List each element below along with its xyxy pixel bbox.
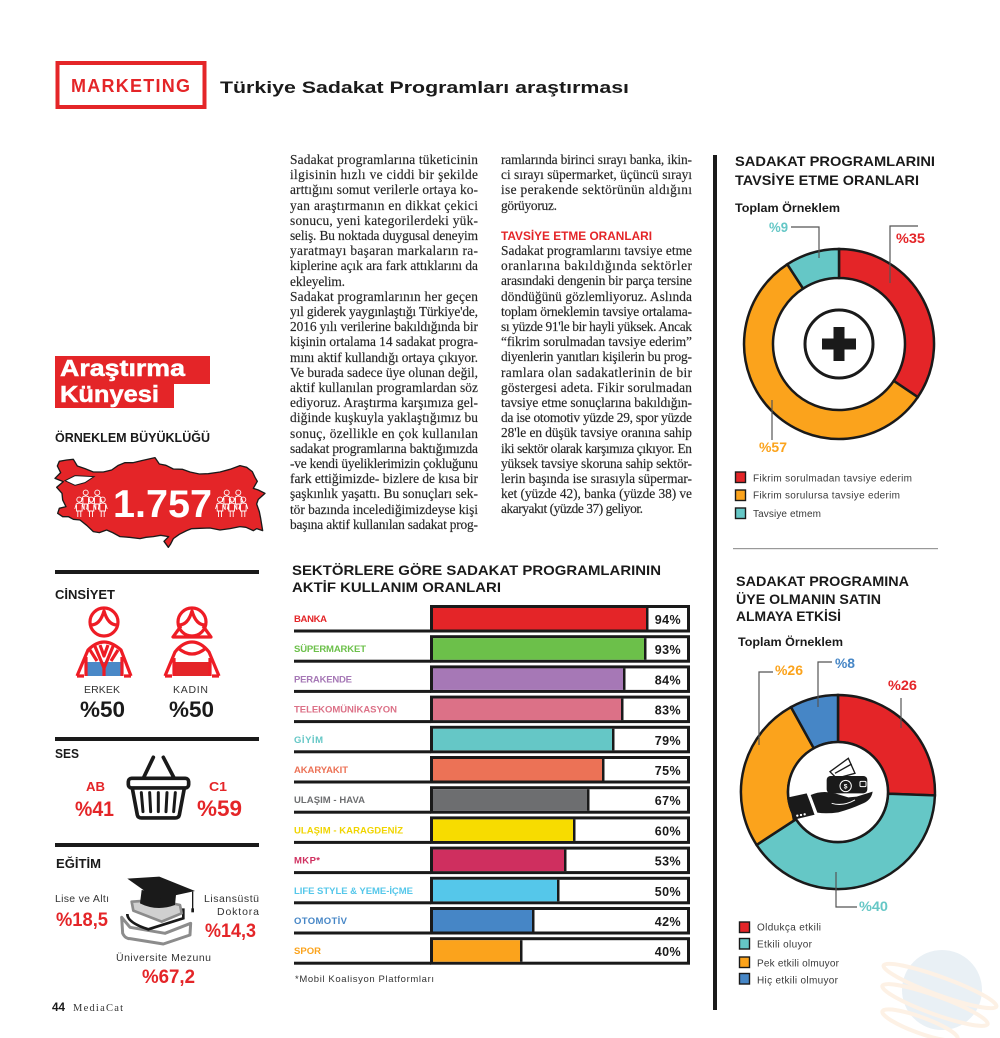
page number and magazine name	[52, 1000, 123, 1014]
high school value	[55, 893, 109, 931]
article column 2: akaryakıt (yüzde 37) geliyor.	[501, 501, 643, 516]
article column 1: ediyoruz. Araştırma karşımıza gel-	[290, 395, 478, 410]
article column 2: ramlara olan sadakatlerinin de bir	[501, 365, 693, 380]
callout: 57%	[759, 400, 787, 455]
bar: Perakende 84%	[294, 667, 688, 693]
legend: purchase effect: Etkili oluyor	[757, 940, 813, 950]
female label and value	[169, 684, 214, 722]
section: gender	[55, 587, 219, 722]
bar: Telekomünikasyon 83%: 83%	[655, 704, 681, 718]
bar chart heading: AKTİF KULLANIM ORANLARI	[292, 579, 501, 595]
bar: Perakende 84%: PERAKENDE	[294, 674, 352, 685]
article column 1: başına aktif kullanılan sadakat prog-	[290, 517, 478, 532]
sample size number: 1.757	[113, 483, 212, 526]
female label and value: KADIN	[173, 684, 208, 696]
article column 1	[290, 152, 479, 532]
article column 1: yıl giderek yaygınlaştığı Türkiye'de,	[290, 304, 478, 319]
callout: 26% orange: %26	[775, 662, 803, 678]
bar: MKP 53%: MKP*	[294, 856, 320, 867]
people icon right	[216, 490, 248, 517]
article column 2: diyenlerin yanıtları kişilerin bu prog-	[501, 349, 692, 364]
C1 value	[197, 779, 242, 821]
icon: hand holding wallet	[788, 758, 873, 820]
AB value	[75, 779, 114, 821]
legend: recommendation: Fikrim sorulmadan tavsiye ederim	[753, 474, 912, 484]
article column 1: Sadakat programlarına tüketicinin	[290, 152, 478, 167]
male label and value: %50	[80, 697, 125, 722]
male label and value: ERKEK	[84, 684, 120, 696]
marketing tag: MARKETING	[71, 76, 190, 96]
marketing tag	[58, 63, 204, 107]
panel heading: Araştırma Künyesi	[55, 355, 210, 408]
bar: MKP 53%	[294, 848, 688, 874]
article column 2: TAVSİYE ETME ORANLARI	[501, 230, 652, 243]
postgraduate value	[204, 893, 259, 942]
article column 1: fark ettiğimizde- bizlere de kısa bir	[290, 471, 479, 486]
bar: MKP 53%: 53%	[655, 855, 681, 869]
postgraduate value: Doktora	[217, 906, 259, 918]
bar: Süpermarket 93%: SÜPERMARKET	[294, 644, 366, 655]
callout: 35%: %35	[896, 230, 925, 246]
article column 1: kiplerine açık ara fark attıklarını da	[290, 258, 478, 273]
bar: Ulaşım Karagdeniz 60%	[294, 818, 688, 844]
article column 1: yan araştırmanın en dikkat çekici	[290, 198, 478, 213]
callout: 8%	[818, 655, 855, 707]
callout: 26% orange	[759, 662, 803, 745]
article column 2: toplam örneklemin tavsiye ortalama-	[501, 304, 692, 319]
bar: Life Style 50%	[294, 878, 688, 904]
article column 2	[501, 152, 693, 516]
heading: purchase effect: SADAKAT PROGRAMINA	[736, 573, 909, 589]
article column 2: lerin başında ise sırasıyla süpermar-	[501, 471, 692, 486]
callout: 26% red: %26	[888, 677, 917, 693]
callout: 26% red	[888, 677, 917, 728]
title: Türkiye Sadakat Programları araştırması	[220, 79, 629, 97]
article column 1: seliş. Bu noktada duygusal deneyim	[290, 228, 479, 243]
C1 value: %59	[197, 796, 242, 821]
article column 1: Sadakat programlarının her geçen	[290, 289, 478, 304]
callout: 35%	[890, 226, 925, 283]
subheading: total sample: Toplam Örneklem	[738, 636, 843, 649]
article column 2: tavsiye etme sonuçlarına bakıldığın-	[501, 395, 692, 410]
bar: Giyim 79%: 79%	[655, 734, 681, 748]
donut chart: recommendation	[744, 249, 934, 439]
article column 2: ket (yüzde 42), banka (yüzde 38) ve	[501, 486, 692, 501]
page number and magazine name: MediaCat	[73, 1003, 123, 1014]
bar: Perakende 84%: 84%	[655, 673, 681, 687]
icon: woman	[165, 608, 219, 676]
bar: Banka 94%	[294, 606, 688, 632]
heading: purchase effect: ÜYE OLMANIN SATIN	[736, 591, 881, 607]
legend: recommendation: Tavsiye etmem	[753, 509, 821, 520]
article column 2: döndüğünü gözlemliyoruz. Aslında	[501, 289, 692, 304]
article column 2: Sadakat programlarını tavsiye etme	[501, 243, 692, 258]
article column 1: -ve kendi üyeliklerimizin çokluğunu	[290, 456, 478, 471]
bar: Spor 40%: 40%	[655, 945, 681, 959]
article column 1: arttığını somut verilerle ortaya ko-	[290, 182, 478, 197]
bar: Akaryakıt 75%: 75%	[655, 764, 681, 778]
article column 2: görüyoruz.	[501, 198, 557, 213]
icon: plus	[822, 327, 856, 361]
legend: purchase effect: Oldukça etkili	[757, 922, 821, 934]
bar: Otomotiv 42%: 42%	[655, 915, 681, 929]
bar chart heading: SEKTÖRLERE GÖRE SADAKAT PROGRAMLARININ	[292, 562, 661, 578]
callout: 40%	[836, 872, 888, 914]
section: education	[55, 856, 259, 988]
C1 value: C1	[209, 779, 227, 794]
bar: Banka 94%: 94%	[655, 613, 681, 627]
university value: Üniversite Mezunu	[116, 952, 211, 964]
bar: Ulaşım Hava 67%	[294, 788, 688, 814]
bar: Telekomünikasyon 83%	[294, 697, 688, 723]
heading: purchase effect	[736, 573, 909, 624]
article column 2: göstergesi adeta. Fikir sorulmadan	[501, 380, 692, 395]
university value	[116, 952, 211, 988]
legend: recommendation	[736, 472, 912, 520]
callout: 40%: %40	[859, 898, 888, 914]
postgraduate value: %14,3	[205, 921, 256, 942]
bar: Banka 94%: BANKA	[294, 614, 327, 625]
donut chart: purchase effect	[741, 695, 935, 889]
bar: Giyim 79%	[294, 727, 688, 753]
bar: Spor 40%	[294, 939, 688, 965]
section: gender: CİNSİYET	[55, 587, 115, 602]
article column 1: şaşkınlık yaşattı. Bu sonuçları sek-	[290, 486, 478, 501]
bar: Giyim 79%: GİYİM	[294, 735, 323, 746]
article column 2: ramlarında birinci sırayı banka, ikin-	[501, 152, 692, 167]
legend: purchase effect: Pek etkili olmuyor	[757, 958, 840, 970]
article column 2: iki sektör olarak karşımıza çıkıyor. En	[501, 441, 692, 456]
heading: recommendation rates: TAVSİYE ETME ORANLARI	[735, 172, 919, 188]
icon: basket	[128, 757, 189, 818]
bar: Ulaşım Hava 67%: 67%	[655, 794, 681, 808]
heading: recommendation rates: SADAKAT PROGRAMLARINI	[735, 153, 935, 169]
postgraduate value: Lisansüstü	[204, 893, 259, 905]
legend: purchase effect: Hiç etkili olmuyor	[757, 976, 839, 986]
bar chart heading	[292, 562, 661, 595]
callout: 57%: %57	[759, 439, 787, 455]
bar: Ulaşım Karagdeniz 60%: 60%	[655, 824, 681, 838]
bar: Ulaşım Karagdeniz 60%: ULAŞIM - KARAGDENİZ	[294, 825, 403, 836]
section: socio-economic status: SES	[55, 747, 79, 761]
AB value: AB	[86, 779, 105, 794]
icon: graduation cap and books	[122, 877, 195, 944]
bar: Ulaşım Hava 67%: ULAŞIM - HAVA	[294, 795, 365, 806]
article column 2: 28'le en düşük tavsiye oranına sahip	[501, 425, 692, 440]
heading: sample size: ÖRNEKLEM BÜYÜKLÜĞÜ	[55, 430, 210, 445]
high school value: Lise ve Altı	[55, 893, 109, 905]
bar chart	[294, 606, 688, 965]
bar: Otomotiv 42%: OTOMOTİV	[294, 916, 348, 927]
callout: 8%: %8	[835, 655, 855, 671]
article column 1: sonucu, yeni kategorilerdeki yük-	[290, 213, 478, 228]
section: socio-economic status	[55, 747, 242, 821]
article column 1: 2016 yılı verilerine bakıldığında bir	[290, 319, 479, 334]
map: Turkey with sample size	[55, 458, 265, 547]
footnote: *Mobil Koalisyon Platformları	[295, 974, 434, 985]
article column 1: sadakat programlarına baktığımızda	[290, 441, 478, 456]
bar: Telekomünikasyon 83%: TELEKOMÜNİKASYON	[294, 705, 397, 716]
bar: Spor 40%: SPOR	[294, 946, 321, 957]
people icon left	[75, 490, 107, 517]
article column 1: diğinde kuşkuyla yaklaştığımız bu	[290, 410, 478, 425]
panel heading: Araştırma Künyesi: Künyesi	[60, 381, 159, 407]
male label and value	[80, 684, 125, 722]
icon: hand holding wallet: $	[844, 783, 848, 790]
bar: Süpermarket 93%	[294, 637, 688, 663]
icon: man	[77, 608, 131, 676]
page number and magazine name: 44	[52, 1000, 65, 1014]
university value: %67,2	[142, 967, 195, 988]
article column 2: ci sırayı süpermarket, üçüncü sırayı	[501, 167, 692, 182]
heading: purchase effect: ALMAYA ETKİSİ	[736, 608, 841, 624]
section: education: EĞİTİM	[56, 856, 101, 871]
article column 2: da ise otomotiv yüzde 29, spor yüzde	[501, 410, 692, 425]
article column 2: “fikrim sorulmadan tavsiye ederim”	[501, 334, 692, 349]
bar: Life Style 50%: 50%	[655, 885, 681, 899]
article column 1: sonuç, özellikle en çok kullanılan	[290, 426, 478, 441]
article column 2: ise perakende sektörünün aldığını	[501, 182, 692, 197]
article column 1: mını aktif kullandığı ortaya çıkıyor.	[290, 350, 478, 365]
planet watermark	[879, 950, 999, 1038]
article column 2: sı yüzde 91'le bir hayli yüksek. Ancak	[501, 319, 692, 334]
subheading: total sample: Toplam Örneklem	[735, 202, 840, 215]
callout: 9%	[769, 219, 819, 258]
bar: Otomotiv 42%	[294, 908, 688, 934]
article column 2: oranlarına bakıldığında sektörler	[501, 258, 693, 273]
bar: Life Style 50%: LIFE STYLE & YEME-İÇME	[294, 886, 413, 897]
article column 1: ilgisinin hızlı ve ciddi bir şekilde	[290, 167, 478, 182]
article column 1: ekleyelim.	[290, 274, 345, 289]
female label and value: %50	[169, 697, 214, 722]
article column 1: yaratmayı başaran markaların ra-	[290, 243, 478, 258]
heading: recommendation rates	[735, 153, 935, 188]
bar: Akaryakıt 75%: AKARYAKIT	[294, 765, 348, 776]
article column 1: aktif kullanılan programlardan söz	[290, 380, 478, 395]
article column 2: arasındaki dengenin bir parça tersine	[501, 273, 692, 288]
article column 1: kişinin ortalama 14 sadakat progra-	[290, 334, 478, 349]
AB value: %41	[75, 798, 114, 821]
high school value: %18,5	[56, 910, 108, 931]
callout: 9%: %9	[769, 219, 788, 235]
legend: purchase effect	[740, 922, 840, 986]
article column 2: yüksek tavsiye skoruna sahip sektör-	[501, 456, 692, 471]
bar: Akaryakıt 75%	[294, 758, 688, 784]
legend: recommendation: Fikrim sorulursa tavsiye ederim	[753, 490, 900, 502]
article column 1: tör bazında incelediğimizdeyse kişi	[290, 502, 478, 517]
article column 1: Ve burada sadece üye olunan değil,	[290, 365, 478, 380]
panel heading: Araştırma Künyesi: Araştırma	[60, 355, 185, 381]
bar: Süpermarket 93%: 93%	[655, 643, 681, 657]
